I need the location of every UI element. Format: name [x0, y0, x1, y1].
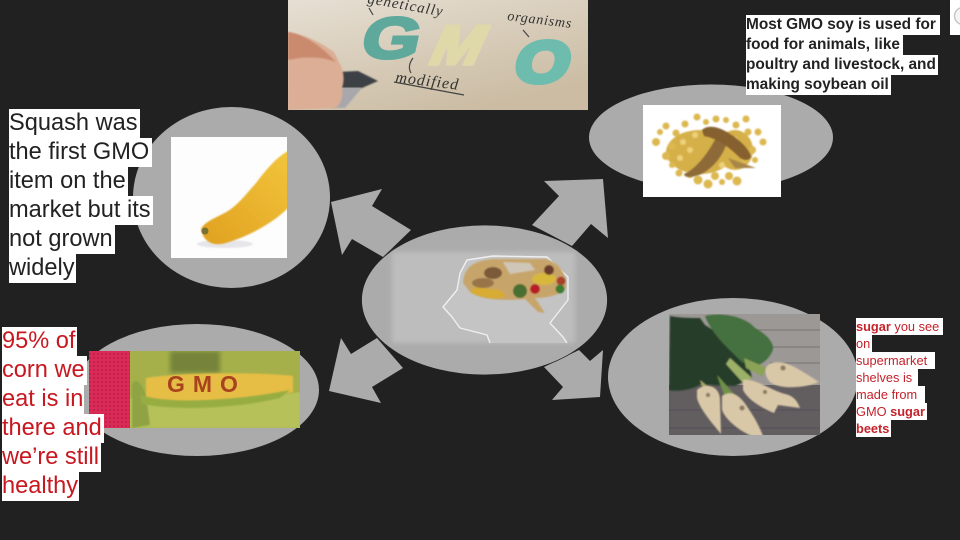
beet roots — [697, 362, 819, 436]
text block: sugar: sugar you see — [856, 319, 939, 334]
text block: soy: making soybean oil — [746, 76, 889, 93]
beet leaves — [669, 314, 773, 398]
text block: soy: food for animals, like — [746, 36, 900, 53]
panel: centre ellipse — [362, 225, 608, 375]
text block: corn: corn we — [2, 357, 85, 383]
word: modified: modified — [395, 69, 460, 94]
text block: squash: not grown — [9, 226, 113, 252]
text block: soy — [746, 15, 940, 95]
text block: squash: the first GMO — [9, 139, 149, 165]
text block: squash: market but its — [9, 197, 151, 223]
text block: sugar: on — [856, 336, 870, 351]
image: squash — [171, 137, 290, 258]
pen — [338, 71, 378, 88]
text block: sugar: GMO sugar — [856, 404, 925, 419]
image: brain of food — [392, 252, 575, 343]
panel: corn ellipse — [75, 324, 319, 456]
image: GMO letters with hand — [288, 0, 588, 110]
text block: corn: healthy — [2, 473, 78, 499]
text block: sugar: supermarket — [856, 353, 927, 368]
soy pods — [684, 127, 756, 177]
corn lettering: GMO — [167, 371, 246, 397]
text block: corn: eat is in — [2, 386, 83, 412]
text block: sugar: beets — [856, 421, 889, 436]
panel: squash ellipse — [133, 107, 330, 288]
text block: corn: there and — [2, 415, 102, 441]
image: corn with GMO — [89, 351, 300, 428]
text block: corn: we’re still — [2, 444, 99, 470]
text block: squash: Squash was — [9, 110, 138, 136]
letter G: G — [356, 6, 428, 71]
text block: squash: item on the — [9, 168, 126, 194]
pink dotted strip — [89, 351, 130, 428]
arrow: to soy — [532, 179, 608, 246]
text block: corn: 95% of — [2, 328, 75, 354]
arrow: to corn — [329, 338, 403, 403]
arrow: to sugar beets — [544, 350, 603, 400]
letter M: M — [421, 14, 499, 76]
arrow: to squash — [331, 189, 411, 257]
text block: squash — [9, 109, 153, 283]
panel: soy ellipse — [589, 84, 833, 190]
text block: soy: poultry and livestock, and — [746, 56, 936, 73]
brain food — [463, 259, 566, 313]
image: soybeans — [643, 105, 781, 197]
husk — [130, 392, 300, 428]
head outline — [443, 256, 568, 343]
text block: sugar — [856, 318, 943, 437]
corn cob — [146, 373, 293, 402]
icon: corner badge — [950, 0, 960, 35]
hand — [288, 32, 344, 110]
letter O: O — [509, 29, 577, 95]
image: sugar beets — [669, 314, 820, 436]
soybeans — [652, 114, 766, 188]
text block: soy: Most GMO soy is used for — [746, 16, 936, 33]
text block: sugar: shelves is — [856, 370, 912, 385]
text block: squash: widely — [9, 255, 75, 281]
word: organisms: organisms — [507, 9, 573, 32]
text block: corn — [2, 327, 104, 501]
panel: sugar beet ellipse — [608, 298, 858, 456]
text block: sugar: made from — [856, 387, 917, 402]
